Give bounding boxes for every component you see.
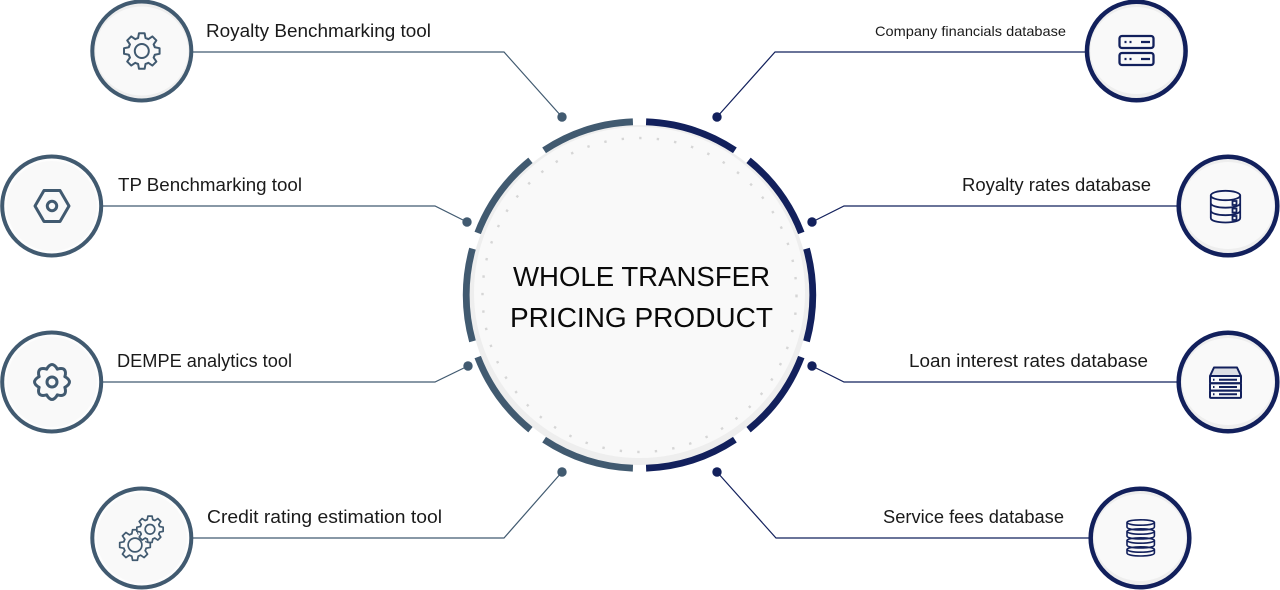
- badge: [92, 488, 191, 588]
- item: Royalty Benchmarking tool: [92, 2, 567, 122]
- hub ring: tools side: [466, 122, 813, 468]
- label: Royalty Benchmarking tool: [206, 21, 431, 41]
- icon: server: [1120, 36, 1154, 65]
- item: Service fees database: [712, 467, 1189, 587]
- icon: stacked disks: [1127, 520, 1154, 556]
- item: DEMPE analytics tool: [2, 332, 473, 432]
- item: Company financials database: [712, 2, 1186, 122]
- label: Company financials database: [875, 23, 1066, 39]
- label: Royalty rates database: [962, 175, 1151, 195]
- icon: hexagon nut: [35, 190, 69, 222]
- badge: [1179, 333, 1277, 431]
- badge: [1087, 2, 1186, 100]
- connector: [193, 467, 567, 538]
- icon: server rack: [1210, 368, 1241, 398]
- label: DEMPE analytics tool: [117, 351, 292, 371]
- connector: [712, 467, 1089, 538]
- badge: [1091, 489, 1189, 587]
- badge: [1179, 157, 1277, 255]
- badge: [2, 156, 101, 256]
- item: Credit rating estimation tool: [92, 467, 567, 588]
- item: Royalty rates database: [807, 157, 1277, 255]
- icon: scalloped nut: [35, 365, 69, 399]
- item: Loan interest rates database: [807, 333, 1277, 431]
- connector: [807, 361, 1177, 382]
- badge: [2, 332, 101, 432]
- label: Loan interest rates database: [909, 351, 1148, 371]
- badge: [92, 2, 191, 100]
- connector: [193, 52, 567, 122]
- hub ring: databases side: [466, 122, 813, 468]
- connector: [103, 206, 472, 227]
- icon: database cylinder: [1211, 191, 1240, 222]
- label: Service fees database: [883, 507, 1064, 527]
- title: WHOLE TRANSFER: [513, 261, 770, 292]
- icon: gear: [124, 33, 160, 69]
- item: TP Benchmarking tool: [2, 156, 472, 256]
- connector: [103, 361, 473, 382]
- label: TP Benchmarking tool: [118, 175, 302, 195]
- central hub: [466, 122, 813, 468]
- connector: [807, 206, 1177, 227]
- title: [510, 261, 773, 333]
- label: Credit rating estimation tool: [207, 507, 442, 527]
- connector: [712, 52, 1085, 122]
- hub disc: [470, 125, 810, 465]
- title: PRICING PRODUCT: [510, 302, 773, 333]
- icon: two gears: [120, 516, 163, 560]
